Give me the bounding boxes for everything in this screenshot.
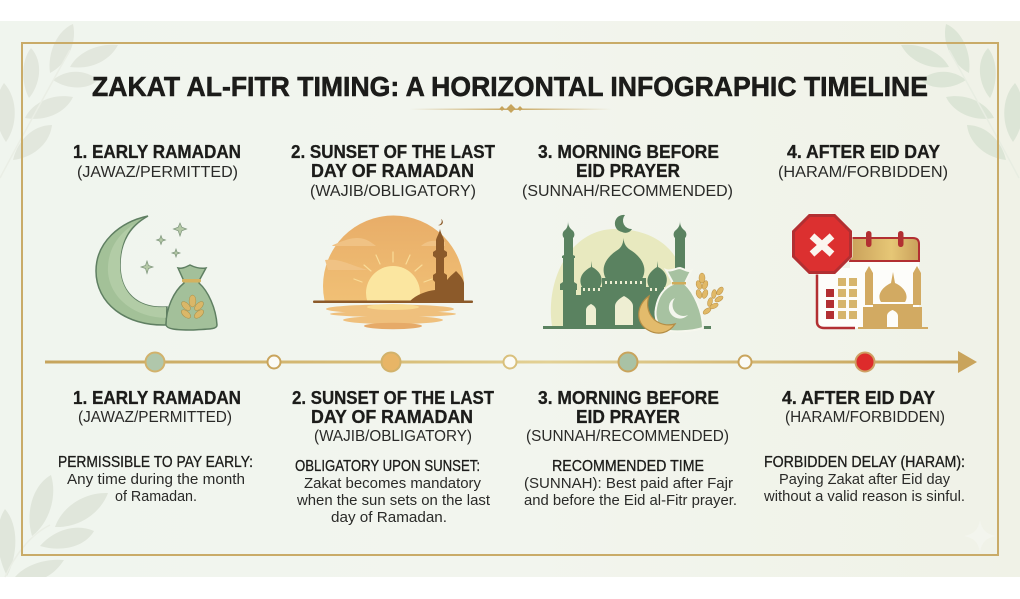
- column 4 lower text: without a valid reason is sinful.: [763, 488, 965, 505]
- green bag: [655, 268, 703, 331]
- column 2 upper heading: [291, 142, 495, 200]
- column 3 upper heading: 3. MORNING BEFORE: [538, 142, 719, 162]
- reflection: [326, 304, 456, 329]
- node 2: [382, 352, 400, 372]
- column 3 lower text: [524, 388, 737, 509]
- column 1 upper heading: (JAWAZ/PERMITTED): [77, 164, 238, 181]
- wheat: [695, 273, 725, 315]
- column 2 lower text: day of Ramadan.: [331, 509, 447, 526]
- column 1 lower text: PERMISSIBLE TO PAY EARLY:: [58, 454, 253, 471]
- sun: [366, 266, 420, 300]
- left minaret: [560, 221, 577, 326]
- column 3 upper heading: [522, 142, 733, 200]
- column 3 lower text: (SUNNAH): Best paid after Fajr: [524, 475, 733, 492]
- column 4 lower text: Paying Zakat after Eid day: [779, 471, 950, 488]
- mosque silhouette: [543, 215, 711, 329]
- column 3 lower text: 3. MORNING BEFORE: [538, 388, 719, 408]
- stop sign: [792, 214, 852, 274]
- column 3 lower text: EID PRAYER: [576, 407, 680, 427]
- gold crescent: [639, 296, 675, 333]
- main dome: [604, 238, 644, 279]
- column 1 lower text: [58, 388, 253, 505]
- calendar date grid: [826, 278, 857, 319]
- connector node: [268, 356, 280, 368]
- icon: sunset with minaret: [313, 216, 473, 330]
- grain bag: [166, 265, 217, 330]
- gold mosque: [858, 266, 928, 329]
- column 4 upper heading: [778, 142, 948, 181]
- crescent moon: [96, 216, 167, 325]
- title: ZAKAT AL-FITR TIMING: A HORIZONTAL INFOGRAPHIC TIMELINE: [92, 71, 928, 102]
- column 4 lower text: [763, 388, 965, 505]
- column 4 lower text: 4. AFTER EID DAY: [782, 388, 935, 408]
- node 4: [856, 352, 874, 372]
- timeline line: [45, 360, 961, 364]
- decorative leaves: bottom left: [0, 475, 108, 577]
- column 2 lower text: (WAJIB/OBLIGATORY): [314, 428, 472, 445]
- stars: [141, 223, 187, 274]
- icon: mosque with bag, crescent and wheat: [543, 215, 725, 333]
- node 1: [146, 352, 164, 372]
- column 2 upper heading: (WAJIB/OBLIGATORY): [310, 183, 476, 200]
- connector node: [738, 356, 752, 368]
- side domes: [580, 261, 602, 287]
- column 4 upper heading: 4. AFTER EID DAY: [787, 142, 940, 162]
- right minaret: [674, 221, 686, 270]
- sun rays: [354, 252, 432, 282]
- connector node: [504, 356, 516, 368]
- column 2 upper heading: DAY OF RAMADAN: [311, 161, 474, 181]
- column 2 lower text: Zakat becomes mandatory: [304, 475, 481, 492]
- column 1 lower text: Any time during the month: [67, 471, 245, 488]
- column 2 upper heading: 2. SUNSET OF THE LAST: [291, 142, 495, 162]
- column 4 lower text: FORBIDDEN DELAY (HARAM):: [764, 454, 965, 471]
- mosque windows and arches: [583, 281, 657, 325]
- column 2 lower text: [292, 388, 494, 526]
- timeline: [45, 351, 977, 373]
- calendar: [817, 231, 919, 328]
- column 4 upper heading: (HARAM/FORBIDDEN): [778, 164, 948, 181]
- column 2 lower text: 2. SUNSET OF THE LAST: [292, 388, 494, 408]
- node 3: [618, 352, 638, 372]
- sky disc: [323, 216, 464, 300]
- column 3 lower text: (SUNNAH/RECOMMENDED): [526, 428, 729, 445]
- column 4 lower text: (HARAM/FORBIDDEN): [785, 409, 945, 426]
- column 1 lower text: of Ramadan.: [115, 488, 197, 505]
- decorative leaves: top right: [901, 24, 1020, 178]
- title ornament: [410, 104, 612, 113]
- body: [575, 278, 664, 326]
- icon: crescent moon, stars and grain bag: [96, 216, 217, 330]
- icon: forbidden stop sign and calendar: [792, 214, 928, 329]
- arrow head: [958, 351, 977, 373]
- column 2 lower text: OBLIGATORY UPON SUNSET:: [295, 458, 480, 475]
- column 1 lower text: 1. EARLY RAMADAN: [73, 388, 241, 408]
- column 2 lower text: when the sun sets on the last: [296, 492, 491, 509]
- column 3 upper heading: (SUNNAH/RECOMMENDED): [522, 183, 733, 200]
- column 1 upper heading: 1. EARLY RAMADAN: [73, 142, 241, 162]
- column 1 upper heading: [73, 142, 241, 181]
- column 1 lower text: (JAWAZ/PERMITTED): [78, 409, 232, 426]
- horizon silhouette: [313, 219, 473, 303]
- column 3 lower text: RECOMMENDED TIME: [552, 458, 704, 475]
- column 3 lower text: and before the Eid al-Fitr prayer.: [524, 492, 737, 509]
- decorative sparkle: [964, 520, 996, 552]
- column 3 upper heading: EID PRAYER: [576, 161, 680, 181]
- halo: [551, 229, 678, 326]
- column 2 lower text: DAY OF RAMADAN: [311, 407, 473, 427]
- decorative leaves: top left: [0, 24, 118, 178]
